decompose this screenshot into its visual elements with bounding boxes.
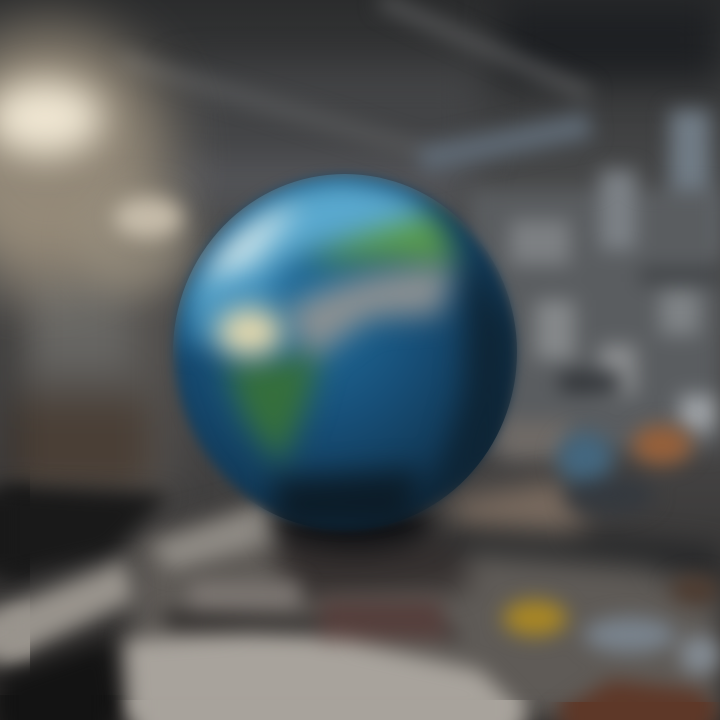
desk surface bbox=[130, 480, 720, 720]
globe sphere bbox=[175, 176, 515, 528]
globe: light blue sky cap bbox=[180, 180, 430, 320]
lamp glow: small bbox=[77, 185, 193, 295]
globe: green band bbox=[305, 215, 458, 262]
globe: southern shadow bbox=[270, 470, 420, 530]
globe: cloud band bbox=[285, 267, 455, 360]
left dark counter bbox=[0, 485, 170, 720]
globe: bright land bbox=[216, 307, 284, 357]
globe: green landmass bbox=[225, 355, 320, 465]
stack of papers bbox=[125, 582, 530, 720]
ceiling beams bbox=[120, 0, 712, 270]
right shelves bbox=[470, 170, 720, 460]
left wall bbox=[0, 200, 170, 500]
globe shadow bbox=[270, 500, 440, 550]
lamp glow: large bbox=[0, 25, 170, 285]
colourful objects at the lower right bbox=[503, 425, 720, 720]
background: dark ceiling bbox=[170, 0, 720, 200]
globe bbox=[175, 176, 515, 550]
globe: upper-left white haze bbox=[200, 205, 300, 280]
desk highlight bbox=[150, 505, 280, 570]
globe: left blue bbox=[175, 278, 290, 345]
globe: dark eastern edge bbox=[434, 260, 517, 504]
